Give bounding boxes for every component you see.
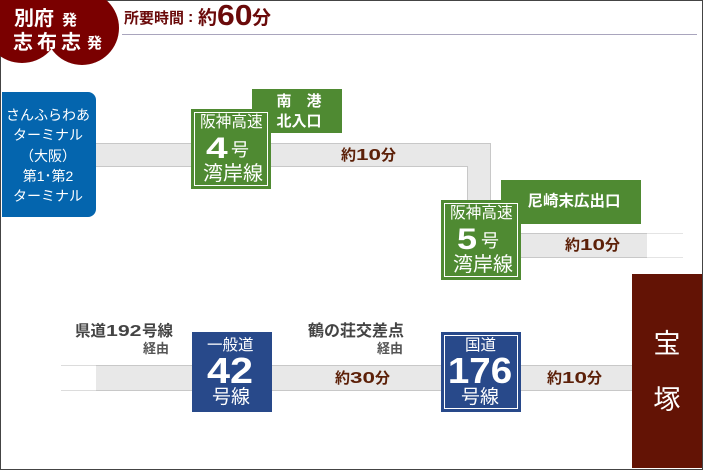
exit label: 南港北入口: 南 港 xyxy=(276,93,322,110)
route sign: Hanshin Expressway No. 4 Wangan Line xyxy=(191,109,271,189)
via label: Prefectural Route 192: 経由 xyxy=(143,341,169,356)
route sign: Hanshin Expressway No. 5 Wangan Line: 5 xyxy=(457,223,477,256)
via label: Prefectural Route 192: 192 xyxy=(106,323,142,340)
exit label: 南港北入口: 北入口 xyxy=(276,113,322,130)
terminal box: origin: ターミナル xyxy=(13,127,83,143)
header badge: departure points: 志布志 xyxy=(13,32,85,54)
exit label: 尼崎末広出口 xyxy=(501,180,641,224)
route sign: General Road 42: 号線 xyxy=(212,387,250,408)
terminal box: origin: 第1･第2 xyxy=(23,168,73,184)
terminal box: origin: さんふらわあ xyxy=(6,107,90,123)
time label: about 30 min: 30 xyxy=(350,370,375,387)
terminal box: origin: ターミナル xyxy=(13,188,83,204)
header badge: departure points: 発 xyxy=(87,35,102,52)
route sign: National Route 176: 号線 xyxy=(461,387,499,408)
terminal box: origin xyxy=(2,92,96,217)
time label: about 10 min, lower: 10 xyxy=(562,370,587,387)
via label: Tsurunoso intersection xyxy=(308,322,404,356)
route sign: General Road 42: 一般道 xyxy=(207,337,254,354)
time label: about 30 min: 約 分 xyxy=(335,370,390,387)
required time heading xyxy=(124,0,271,32)
required time heading: 所要時間 xyxy=(124,10,184,27)
via label: Tsurunoso intersection: 経由 xyxy=(377,341,403,356)
time label: about 10 min, lower: 約 分 xyxy=(547,370,602,387)
route sign: Hanshin Expressway No. 5 Wangan Line: 湾岸線 xyxy=(453,254,513,276)
required time heading: 分 xyxy=(252,8,271,29)
terminal box: origin: （大阪） xyxy=(20,148,76,164)
route sign: Hanshin Expressway No. 5 Wangan Line xyxy=(441,200,521,280)
destination box: Takarazuka: 塚 xyxy=(654,385,680,415)
route sign: National Route 176: 176 xyxy=(448,350,512,391)
destination box: Takarazuka: 宝 xyxy=(654,329,680,359)
route sign: Hanshin Expressway No. 5 Wangan Line: 号 xyxy=(481,231,499,251)
route sign: Hanshin Expressway No. 5 Wangan Line: 阪神高速 xyxy=(450,205,513,222)
required time heading: 約 xyxy=(198,8,217,29)
upper route road xyxy=(96,143,491,200)
via label: Tsurunoso intersection: 鶴の荘交差点 xyxy=(308,323,404,340)
header badge: departure points xyxy=(0,0,119,65)
via label: Prefectural Route 192: 県道 号線 xyxy=(75,323,173,340)
route sign: National Route 176 xyxy=(441,332,521,412)
via label: Prefectural Route 192 xyxy=(75,322,173,356)
header badge: departure points: 発 xyxy=(62,12,77,29)
route sign: General Road 42 xyxy=(192,332,272,412)
route sign: Hanshin Expressway No. 4 Wangan Line: 阪神高速 xyxy=(200,114,263,131)
lower route road xyxy=(61,365,632,391)
time label: about 10 min, middle: 約 分 xyxy=(565,237,620,254)
required time heading: : xyxy=(188,9,193,26)
route sign: Hanshin Expressway No. 4 Wangan Line: 4 xyxy=(206,132,228,165)
time label: about 10 min, upper: 約 分 xyxy=(341,147,396,164)
route sign: Hanshin Expressway No. 4 Wangan Line: 号 xyxy=(231,140,249,160)
time label: about 10 min, upper: 10 xyxy=(356,147,381,164)
exit label: 南港北入口 xyxy=(252,89,342,133)
header badge: departure points: 別府 xyxy=(14,8,54,30)
route sign: General Road 42: 42 xyxy=(207,350,253,391)
required time heading: 60 xyxy=(217,0,252,32)
time label: about 10 min, middle: 10 xyxy=(580,237,605,254)
route sign: National Route 176: 国道 xyxy=(465,337,496,354)
destination box: Takarazuka xyxy=(632,274,702,468)
route sign: Hanshin Expressway No. 4 Wangan Line: 湾岸線 xyxy=(203,163,263,185)
lower-right road segment xyxy=(521,233,683,258)
exit label: 尼崎末広出口: 尼崎末広出口 xyxy=(527,193,620,210)
